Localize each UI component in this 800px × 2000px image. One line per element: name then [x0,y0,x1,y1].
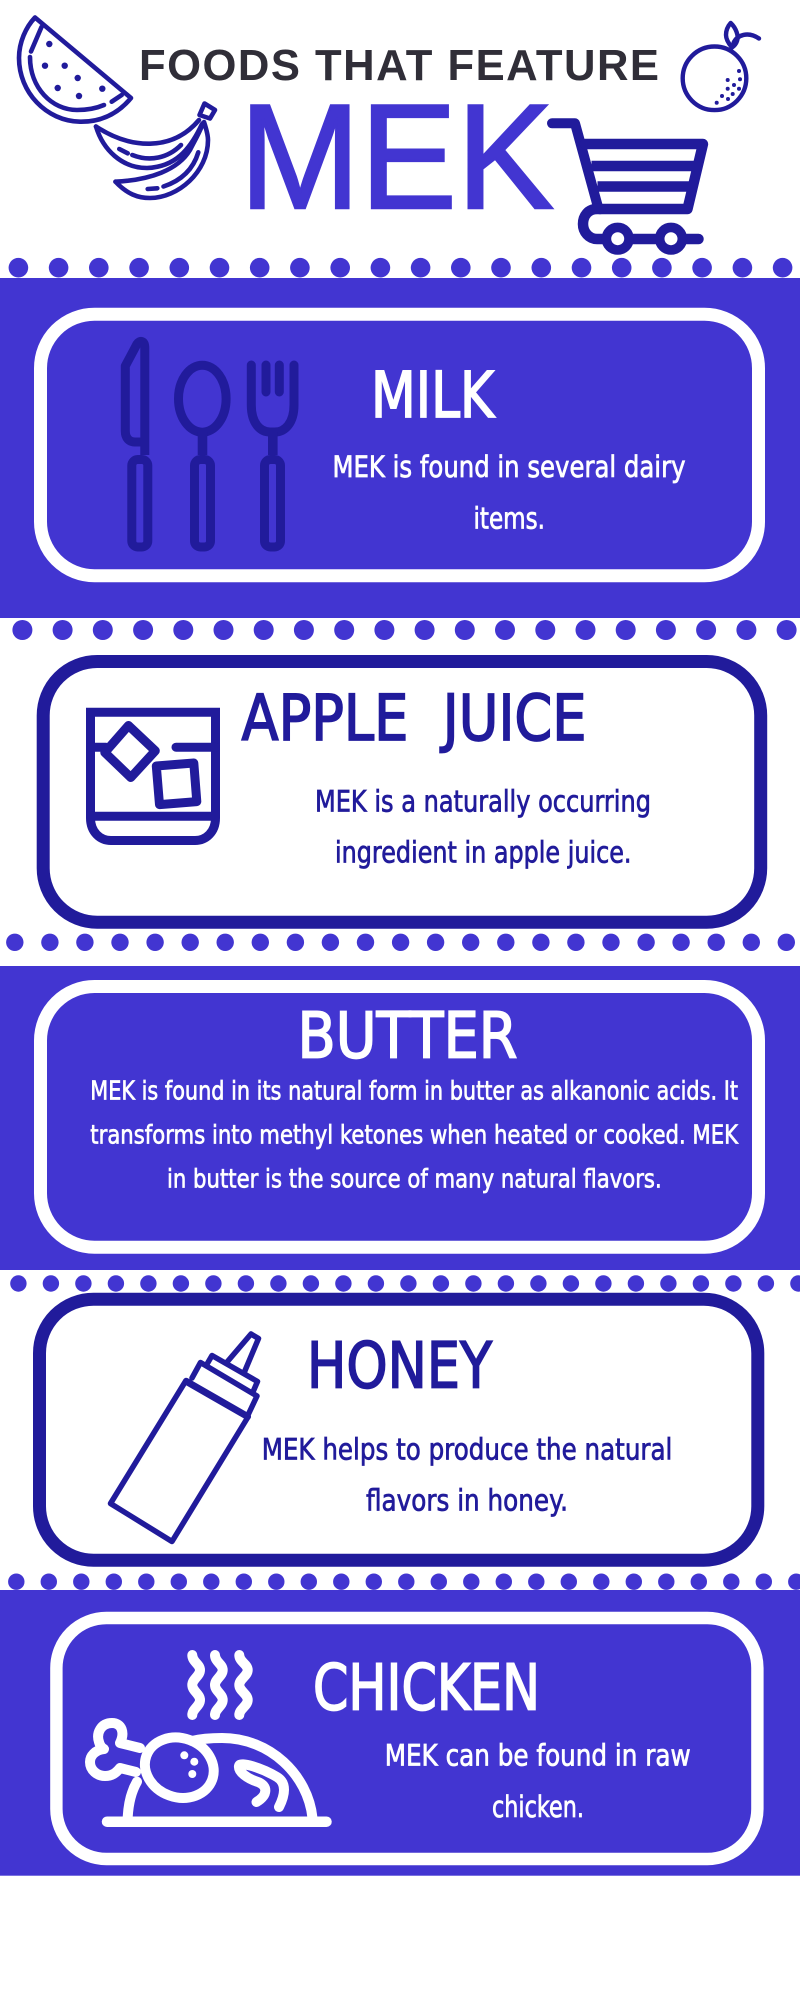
heading: chicken: CHICKEN [313,1651,540,1724]
icon: roast chicken [90,1655,326,1822]
icon: orange [683,23,759,110]
heading: apple juice: APPLE JUICE [242,682,586,755]
text: chicken: MEK can be found in raw [385,1739,691,1773]
dotted divider 5 [8,1574,800,1590]
header [19,18,759,250]
text: chicken: chicken. [492,1790,584,1824]
title line: FOODS THAT FEATURE [139,42,659,90]
heading: butter: BUTTER [298,1000,518,1073]
panel: chicken [0,1590,800,1876]
text: chicken [385,1739,691,1824]
text: apple juice [315,785,651,869]
text: milk: items. [474,502,545,536]
text: milk [332,450,686,536]
text: butter [90,1076,739,1194]
icon: shopping cart [552,123,703,250]
text: honey [262,1432,672,1518]
heading: milk: MILK [371,359,495,432]
icon: banana [96,104,215,198]
dotted divider 2 [12,620,797,640]
panel: apple juice [43,662,761,922]
dotted divider 4 [10,1275,800,1292]
icon: watermelon [19,18,131,122]
panel: butter [0,966,800,1270]
text: honey: MEK helps to produce the natural [262,1432,672,1466]
panel: milk [0,278,800,618]
icon: glass with ice [90,712,216,840]
text: butter: in butter is the source of many natural flavors. [167,1164,662,1194]
text: apple juice: ingredient in apple juice. [335,835,632,869]
panel: honey [40,1299,758,1560]
icon: squeeze bottle [110,1334,258,1542]
text: milk: MEK is found in several dairy [332,450,686,484]
icon: cutlery [125,341,294,547]
text: honey: flavors in honey. [366,1484,568,1518]
text: apple juice: MEK is a naturally occurring [315,785,651,819]
heading: honey: HONEY [307,1329,492,1402]
title MEK: MEK [240,73,554,240]
dotted divider 3 [6,934,795,951]
dotted divider 1 [9,258,792,278]
